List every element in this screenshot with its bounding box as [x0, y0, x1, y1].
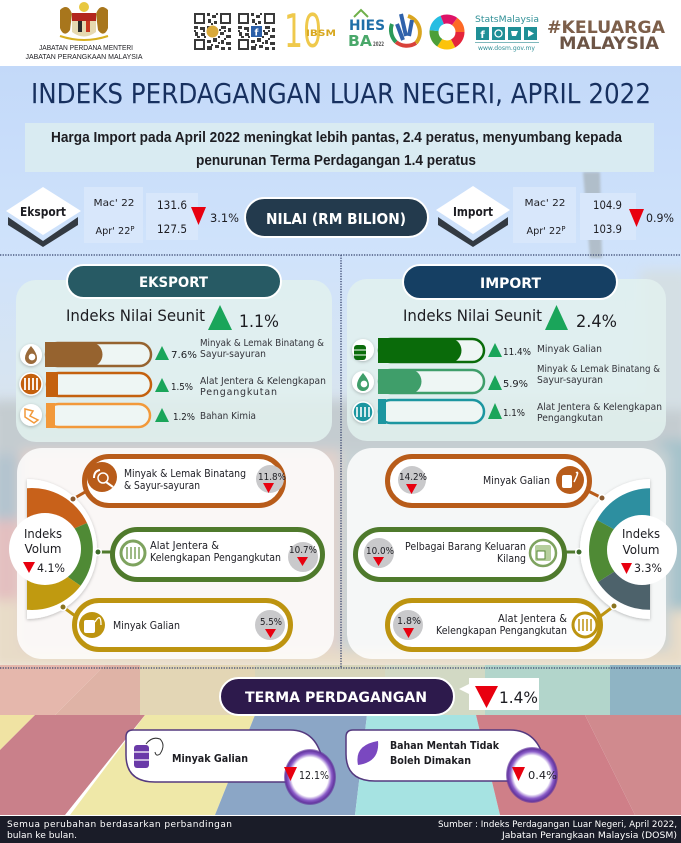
- row: oils and fats: [20, 338, 325, 367]
- text: agency names: JABATAN PERDANA MENTERI: [39, 43, 133, 52]
- import unit value headline: Indeks Nilai Seunit: [403, 306, 542, 325]
- source: [438, 820, 677, 841]
- headline summary box: [25, 123, 654, 172]
- card: export machinery: Alat Jentera &: [150, 540, 219, 552]
- card: export oils and fats: & Sayur-sayuran: [124, 480, 200, 492]
- row: machinery and transport: 1.1%: [503, 408, 525, 419]
- card: import manufactured goods: 10.0%: [366, 546, 394, 557]
- card: terms of trade mineral fuels: Minyak Galian: [172, 752, 248, 765]
- icon: export diamond: Eksport: [20, 205, 66, 219]
- import change: 0.9%: [646, 211, 674, 225]
- row: oils and fats: Minyak & Lemak Binatang &: [200, 338, 325, 349]
- headline summary box: Harga Import pada April 2022 meningkat lebih pantas, 2.4 peratus, menyumbang kepada: [51, 130, 623, 146]
- icon: HIES BA 2022 logo: [348, 10, 385, 50]
- card: terms of trade inedible raw materials: Boleh Dimakan: [390, 755, 471, 767]
- import values: 104.9: [593, 198, 622, 212]
- icon: HIES BA 2022 logo: 2022: [373, 41, 384, 48]
- icon: oil barrel: [556, 466, 584, 494]
- footer: [0, 816, 681, 843]
- chart: import volume half donut: [580, 479, 677, 619]
- row: oils and fats: Minyak & Lemak Binatang &: [537, 364, 661, 375]
- export values: 127.5: [157, 222, 187, 236]
- chart: export volume half donut: 4.1%: [37, 561, 65, 575]
- card: import manufactured goods: Pelbagai Barang Keluaran: [405, 541, 526, 553]
- row: machinery and transport: [353, 399, 662, 424]
- row: machinery and transport: Pengangkutan: [537, 413, 603, 424]
- row: mineral fuels: [352, 338, 602, 363]
- import change: [629, 209, 674, 227]
- export unit value headline: [66, 305, 279, 332]
- chart: import volume half donut: 3.3%: [634, 561, 662, 575]
- source: Jabatan Perangkaan Malaysia (DOSM): [501, 831, 677, 841]
- heading: eksport: EKSPORT: [139, 275, 208, 291]
- card: import machinery: [388, 600, 618, 650]
- icon: SDG wheel: [434, 19, 460, 45]
- card: export machinery: [94, 530, 322, 580]
- panel: import unit value: [347, 265, 666, 441]
- export period labels: Apr' 22: [96, 226, 131, 237]
- footnote: [7, 820, 232, 841]
- row: oils and fats: Sayur-sayuran: [200, 349, 266, 360]
- import period labels: P: [561, 225, 566, 233]
- card: import mineral fuels: 14.2%: [399, 472, 427, 483]
- icon: 10 years logo: IBSM: [306, 29, 336, 39]
- icon: import diamond: Import: [453, 205, 493, 219]
- icon: export diamond: [6, 187, 81, 247]
- card: import machinery: Alat Jentera &: [498, 613, 567, 625]
- heading: terma perdagangan: TERMA PERDAGANGAN: [245, 690, 427, 706]
- card: import machinery: Kelengkapan Pengangkutan: [436, 625, 567, 637]
- footnote: bulan ke bulan.: [7, 831, 77, 841]
- import period labels: [513, 187, 576, 243]
- icon: chemicals: [20, 404, 42, 426]
- icon: machinery sliders: [121, 541, 145, 565]
- card: export mineral fuels: [59, 600, 290, 650]
- icon: StatsMalaysia social block: f: [480, 30, 485, 41]
- export unit value headline: 1.1%: [239, 312, 279, 332]
- icon: oil magnifier: [20, 344, 42, 366]
- icon: oil magnifier: [87, 462, 117, 492]
- icon: leaf: [357, 741, 378, 765]
- icon: machinery sliders: [353, 402, 373, 422]
- ring badge: 0.4%: [506, 747, 558, 803]
- chart: import volume half donut: Indeks: [622, 527, 660, 541]
- import values: 103.9: [593, 222, 622, 236]
- icon: HIES BA 2022 logo: HIES: [349, 18, 385, 34]
- icon: manufactured goods: [530, 540, 556, 566]
- text: agency names: JABATAN PERANGKAAN MALAYSIA: [26, 52, 143, 61]
- card: import manufactured goods: Kilang: [497, 553, 526, 565]
- ring badge: 12.1%: 12.1%: [299, 769, 329, 782]
- export values: 131.6: [157, 198, 187, 212]
- row: oils and fats: [352, 364, 661, 394]
- heading: nilai: NILAI (RM BILION): [266, 210, 406, 228]
- card: terms of trade inedible raw materials: Bahan Mentah Tidak: [390, 740, 500, 752]
- card: export oils and fats: [69, 456, 286, 506]
- chart: export volume half donut: [9, 479, 97, 619]
- export unit value headline: Indeks Nilai Seunit: [66, 306, 205, 325]
- card: export oils and fats: Minyak & Lemak Binatang: [124, 468, 246, 480]
- export period labels: P: [130, 225, 134, 233]
- card: export machinery: Kelengkapan Pengangkutan: [150, 552, 281, 564]
- card: export machinery: 10.7%: [289, 545, 317, 556]
- card: terms of trade inedible raw materials: [346, 730, 558, 803]
- heading: nilai: [245, 198, 428, 237]
- import unit value headline: [403, 305, 617, 332]
- export period labels: [84, 187, 143, 243]
- row: oils and fats: 5.9%: [503, 379, 528, 390]
- row: chemicals: 1.2%: [173, 412, 195, 423]
- export change: 3.1%: [210, 211, 239, 225]
- import values: [580, 193, 636, 240]
- icon: StatsMalaysia social block: www.dosm.gov.my: [478, 45, 535, 52]
- row: mineral fuels: Minyak Galian: [537, 344, 602, 355]
- export value block: [6, 187, 239, 247]
- card: export oils and fats: 11.8%: [258, 472, 286, 483]
- icon: HIES BA 2022 logo: BA: [348, 32, 372, 50]
- callout: terms of trade change: 1.4%: [499, 688, 538, 707]
- text: Keluarga Malaysia hashtag: #KELUARGA: [547, 18, 665, 37]
- icon: StatsMalaysia social block: [475, 15, 539, 52]
- row: chemicals: [20, 403, 256, 428]
- panel: export volume index: [9, 448, 334, 659]
- icon: oil magnifier: [352, 371, 374, 393]
- icon: 10 years logo: 10: [284, 4, 322, 58]
- source: Sumber : Indeks Perdagangan Luar Negeri, April 2022,: [438, 820, 677, 830]
- card: import mineral fuels: Minyak Galian: [483, 475, 550, 487]
- icon: oil barrel: [352, 339, 374, 361]
- icon: hand logo: [391, 14, 420, 46]
- icon: QR code 2: [238, 13, 275, 50]
- card: export mineral fuels: Minyak Galian: [113, 620, 180, 632]
- chart: export volume half donut: Volum: [24, 542, 62, 556]
- ring badge: 0.4%: 0.4%: [528, 769, 557, 782]
- card: import mineral fuels: [388, 456, 606, 506]
- icon: import diamond: [436, 186, 510, 247]
- row: machinery and transport: Alat Jentera & Kelengkapan: [537, 402, 662, 413]
- callout: terms of trade change: [459, 678, 539, 710]
- import unit value headline: 2.4%: [576, 312, 617, 332]
- card: import machinery: 1.8%: [397, 616, 421, 627]
- ring badge: 12.1%: [284, 749, 336, 805]
- import value block: [436, 186, 674, 247]
- icon: coat of arms: [60, 2, 108, 40]
- chart: import volume half donut: Volum: [622, 543, 660, 557]
- icon: QR code 2: f: [255, 28, 259, 38]
- row: chemicals: Bahan Kimia: [200, 411, 256, 422]
- row: oils and fats: 7.6%: [171, 350, 197, 361]
- icon: StatsMalaysia social block: StatsMalaysia: [475, 15, 539, 25]
- row: mineral fuels: 11.4%: [503, 347, 531, 358]
- row: machinery and transport: 1.5%: [171, 382, 193, 393]
- card: terms of trade mineral fuels: [126, 730, 336, 805]
- header band: [0, 0, 681, 66]
- row: machinery and transport: [20, 372, 326, 398]
- text: Keluarga Malaysia hashtag: [547, 18, 665, 53]
- icon: machinery sliders: [573, 613, 597, 637]
- icon: machinery sliders: [20, 373, 42, 395]
- card: export mineral fuels: 5.5%: [260, 617, 282, 628]
- heading: import: IMPORT: [480, 276, 541, 292]
- headline summary box: penurunan Terma Perdagangan 1.4 peratus: [196, 153, 476, 169]
- panel: import volume index: [347, 448, 677, 659]
- card: import manufactured goods: [356, 530, 583, 580]
- heading: import: [403, 265, 617, 299]
- panel: export unit value: [16, 265, 332, 442]
- import period labels: Apr' 22: [526, 226, 562, 237]
- icon: QR code 1: [194, 13, 231, 50]
- row: machinery and transport: Pengangkutan: [200, 387, 277, 398]
- export change: [191, 207, 239, 225]
- footnote: Semua perubahan berdasarkan perbandingan: [7, 820, 232, 830]
- row: oils and fats: Sayur-sayuran: [537, 375, 603, 386]
- chart: export volume half donut: Indeks: [24, 527, 62, 541]
- export period labels: Mac' 22: [94, 198, 134, 209]
- icon: oil barrel: [79, 612, 105, 638]
- heading: eksport: [67, 265, 281, 298]
- import period labels: Mac' 22: [524, 198, 566, 209]
- icon: oil barrel and nozzle: [134, 738, 163, 768]
- export values: [146, 193, 198, 240]
- heading: terma perdagangan: [220, 678, 454, 715]
- text: Keluarga Malaysia hashtag: MALAYSIA: [559, 34, 659, 53]
- row: machinery and transport: Alat Jentera & Kelengkapan: [200, 376, 326, 387]
- text: agency names: [26, 43, 143, 61]
